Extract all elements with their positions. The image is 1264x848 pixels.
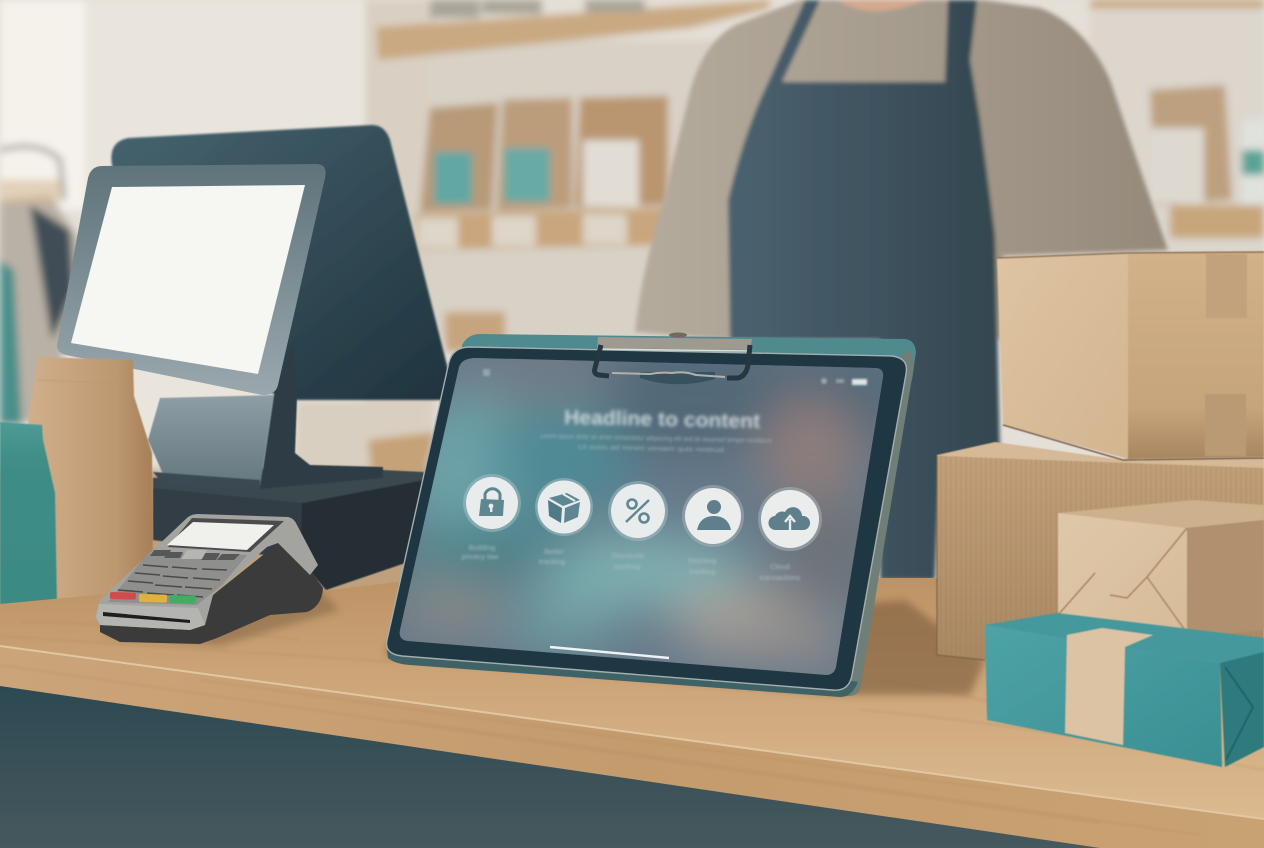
teal gift box [985,613,1264,767]
tablet body [387,347,906,690]
apron [728,0,1000,580]
counter front panel [0,680,1264,848]
terminal keypad keys [118,565,227,597]
status icons [483,369,867,385]
middle shelf [415,208,668,250]
blurred sub text [540,433,772,454]
terminal function buttons [150,550,240,560]
monitor stand [148,340,383,489]
parcel top [1058,500,1264,528]
clip shadow on tablet [640,372,715,384]
blurred icon captions [461,543,800,582]
paper coffee bag [28,357,153,606]
blurred icon captions: Better [544,547,565,556]
blurred icon captions: tracking [689,567,715,576]
tablet silver rim [387,347,906,690]
blurred sub text: Lorem ipsum dolor sit amet consectetur adipiscing elit sed do eiusmod tempor incididunt [540,433,772,445]
clipboard board [462,334,916,380]
icon: padlock [463,474,521,532]
shelf labels [418,214,627,248]
blurred headline: Headline to content [564,407,761,433]
cash register monitor [57,125,452,590]
parcel front [1058,513,1187,637]
yellow key [139,594,167,603]
kraft wrapped parcel [1058,500,1264,637]
red key [110,592,136,600]
person: shop assistant in apron [635,0,1168,580]
middle cardboard box [937,425,1264,661]
terminal silver body [95,514,318,630]
payment card terminal [95,514,323,644]
lower wall behind the counter [0,470,440,640]
lower shelf [368,432,435,475]
parcel side [1187,520,1264,637]
wooden counter [0,578,1264,848]
teal bag [0,422,57,612]
monitor white screen [71,185,305,374]
clip loop [594,345,750,378]
sweater [635,0,1168,340]
stacked parcels [937,252,1264,767]
icon: box [535,478,593,536]
terminal front strip [96,604,205,630]
top cardboard box [997,252,1264,459]
top shelf [376,0,770,60]
blurred icon captions: transactions [760,573,800,582]
terminal screen [167,522,274,550]
blurred icon captions: Discounts [612,551,645,560]
home indicator [550,647,669,658]
counter front lip [0,646,1264,848]
right shelf [1170,205,1264,238]
monitor bezel [57,164,326,395]
monitor base box [153,466,424,590]
icon: cloud upload [758,487,822,551]
counter top surface [0,578,1264,819]
shelf bags [420,103,498,212]
terminal shadow [100,590,340,646]
tablet bottom edge [387,648,858,697]
blurred sub text: Ut enim ad minim veniam quis nostrud [578,444,724,454]
monitor back [111,125,452,400]
blurred icon captions: tracking [614,562,640,571]
blurred icon captions: Stocking [688,556,716,565]
wood grain [0,622,1264,835]
clipboard tablet [387,332,916,697]
background: blurred shop wall and shelves [0,0,1264,640]
clip top bar [597,337,752,350]
card slot [103,612,190,623]
icon: person [682,485,744,547]
counter edge highlight [0,646,1264,819]
clothing rail [0,147,64,200]
terminal dark side [100,543,323,644]
green key [169,595,196,604]
blurred icon captions: tracking [539,557,565,566]
tablet screen [390,350,900,680]
terminal keypad panel [108,553,247,605]
terminal screen bezel [168,518,284,552]
blurred icon captions: Building [469,543,495,552]
icon: percent [608,481,668,541]
neck [838,0,925,11]
blurred icon captions: privacy law [461,552,499,561]
bags on the top of the shelf [430,0,645,18]
clip pivot [669,332,687,338]
clip wire [612,372,725,377]
blurred icon captions: Cloud [770,562,790,571]
clipboard edge [836,350,914,696]
tablet shadow [385,600,985,695]
kraft ribbon [1065,628,1153,745]
clipboard clip [594,332,752,384]
